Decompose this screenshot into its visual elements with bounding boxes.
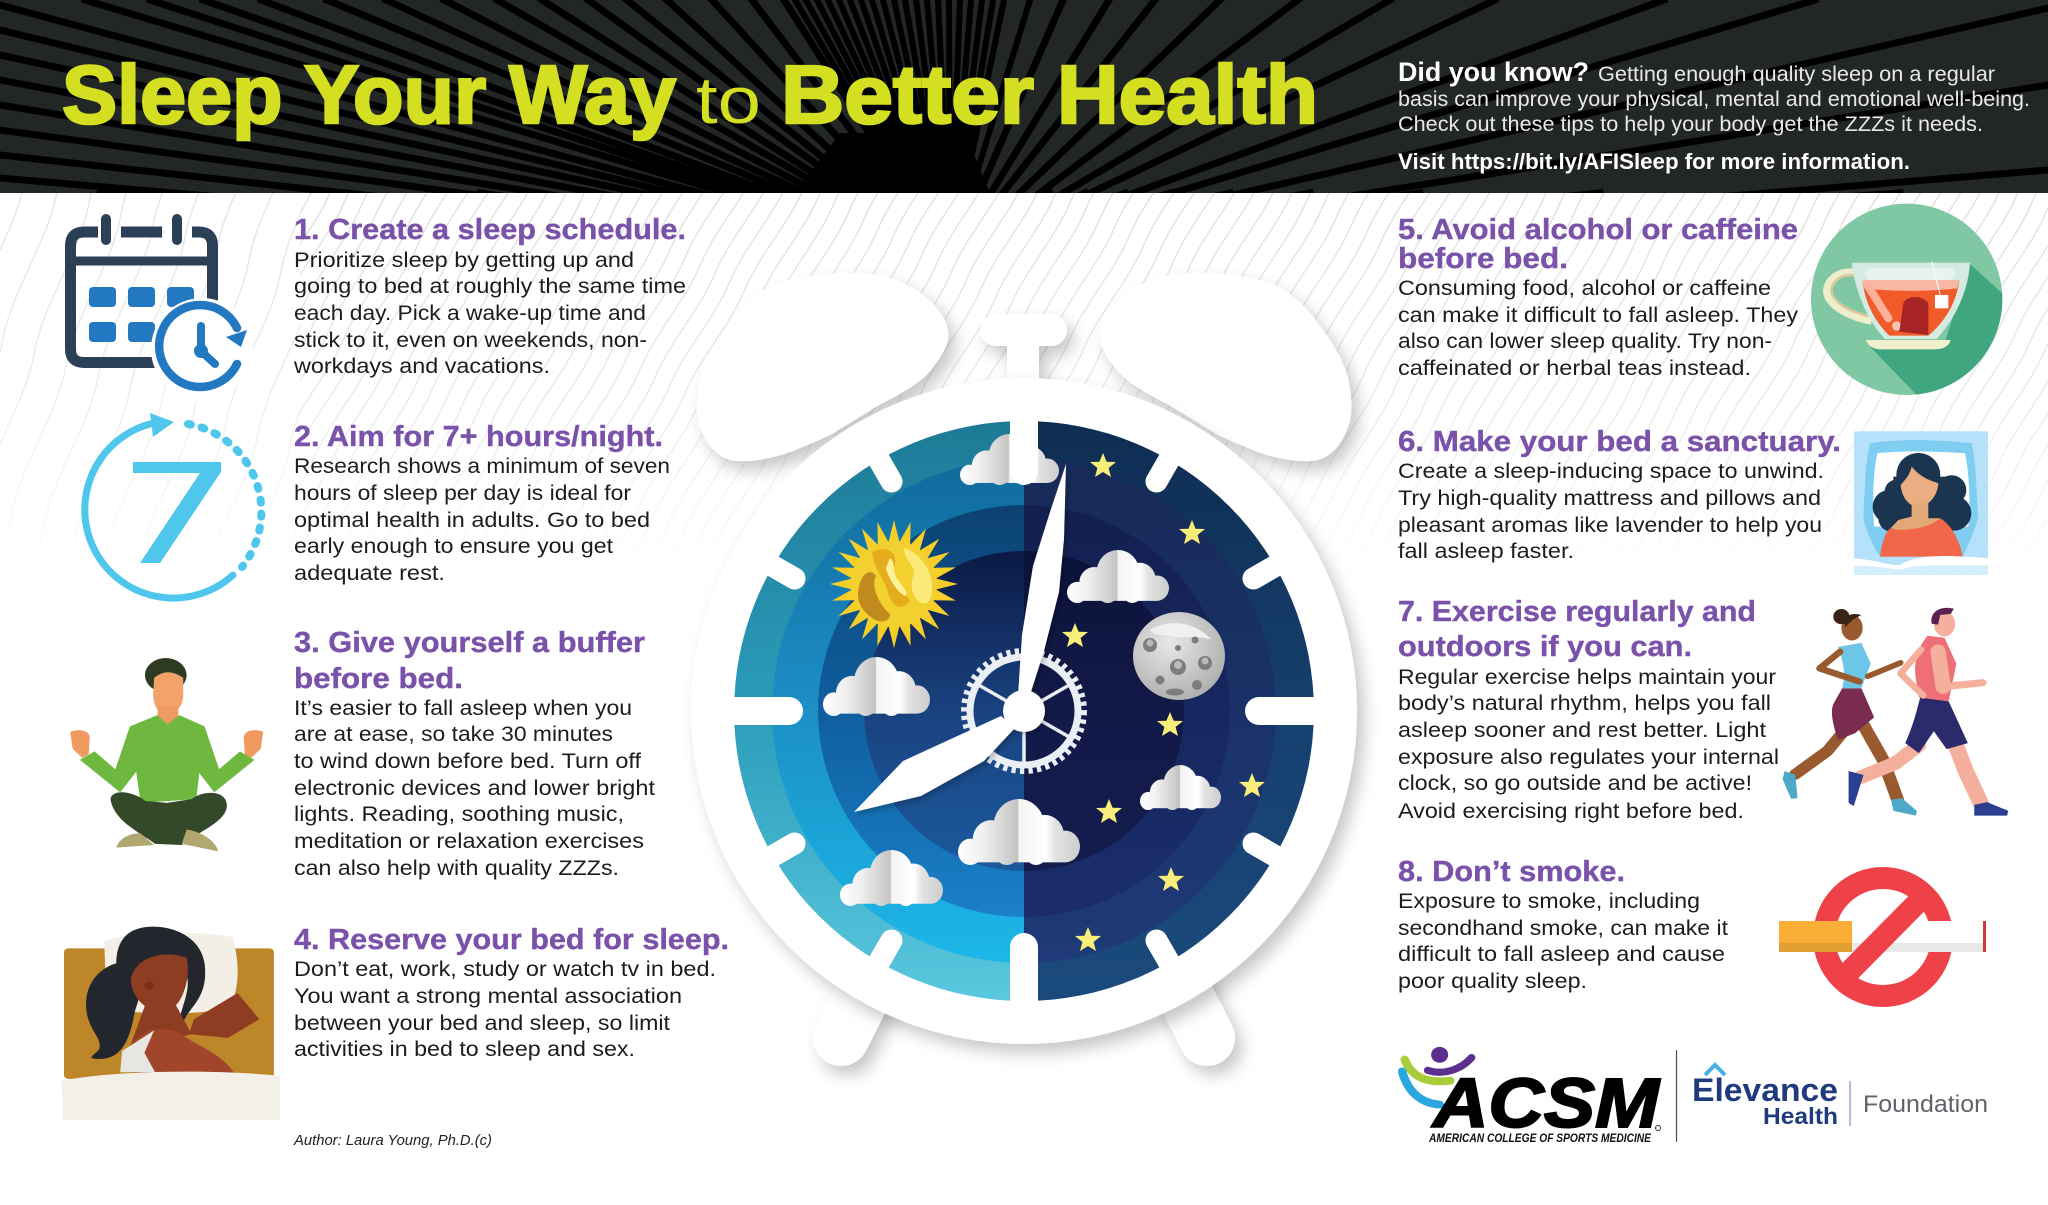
body 8 [1398, 890, 1728, 993]
body 6: Try high-quality mattress and pillows and [1398, 487, 1821, 510]
body 2: adequate rest. [294, 562, 445, 585]
section 8 [1398, 856, 1728, 993]
heading 2: 2. Aim for 7+ hours/night. [294, 421, 663, 453]
body 2: hours of sleep per day is ideal for [294, 482, 631, 505]
heading 5: before bed. [1398, 243, 1568, 275]
alarm clock illustration [691, 273, 1357, 1044]
title: Health [1057, 48, 1318, 141]
clock body [691, 378, 1357, 1044]
body 8: Exposure to smoke, including [1398, 890, 1700, 913]
title: Sleep Your Way [62, 48, 676, 141]
body 3: lights. Reading, soothing music, [294, 803, 624, 826]
section 7 [1398, 596, 1779, 823]
body 5: also can lower sleep quality. Try non- [1398, 330, 1772, 353]
section 1 [293, 214, 686, 378]
body 6: pleasant aromas like lavender to help you [1398, 514, 1822, 537]
author credit: Author: Laura Young, Ph.D.(c) [293, 1132, 492, 1149]
did you know text block: basis can improve your physical, mental and emotional well-being. [1398, 88, 2030, 111]
body 7: Avoid exercising right before bed. [1398, 800, 1744, 823]
icon: no smoking [1779, 878, 1986, 996]
body 3: meditation or relaxation exercises [294, 830, 644, 853]
logo: Elevance Health Foundation: Health [1763, 1103, 1838, 1129]
did you know text block: Getting enough quality sleep on a regular [1598, 63, 1995, 86]
logo: ACSM [1402, 1047, 1661, 1145]
body 7: exposure also regulates your internal [1398, 746, 1779, 769]
body 7 [1398, 666, 1779, 823]
title: Better [781, 48, 1034, 141]
body 6 [1398, 460, 1824, 563]
body 3: electronic devices and lower bright [294, 777, 655, 800]
heading 5 [1398, 214, 1798, 275]
body 2 [294, 455, 670, 585]
icon: seven hour circle [85, 413, 261, 598]
icon: calendar and clock [70, 219, 253, 400]
body 2: optimal health in adults. Go to bed [294, 509, 650, 532]
clock dial night half [1024, 421, 1314, 1001]
did you know text block: Visit https://bit.ly/AFISleep for more information. [1398, 149, 1910, 174]
body 1: going to bed at roughly the same time [294, 275, 686, 298]
body 7: body’s natural rhythm, helps you fall [1398, 692, 1771, 715]
icon: meditating man [70, 658, 263, 851]
body 8: difficult to fall asleep and cause [1398, 943, 1725, 966]
heading 6: 6. Make your bed a sanctuary. [1398, 426, 1841, 458]
body 1 [293, 249, 686, 378]
body 5: caffeinated or herbal teas instead. [1398, 357, 1751, 380]
header band with rays [0, 0, 2048, 193]
body 5: Consuming food, alcohol or caffeine [1398, 277, 1771, 300]
gear [965, 652, 1083, 770]
section 3 [294, 627, 655, 880]
body 6: Create a sleep-inducing space to unwind. [1398, 460, 1824, 483]
body 8: secondhand smoke, can make it [1398, 917, 1728, 940]
logo: Elevance Health Foundation: Elevance [1692, 1072, 1838, 1108]
icon: two runners [1783, 608, 2008, 816]
heading 3: before bed. [294, 663, 463, 695]
clock dial day half [734, 421, 1024, 1001]
body 1: each day. Pick a wake-up time and [294, 302, 646, 325]
logo: Elevance Health Foundation: Foundation [1863, 1091, 1988, 1118]
did you know text block: Did you know? [1398, 57, 1589, 87]
minute and hour hands [854, 464, 1066, 812]
heading 8: 8. Don’t smoke. [1398, 856, 1625, 888]
icon: tea cup [1811, 204, 2013, 397]
clock bells, stem and feet [697, 273, 1351, 1038]
section 5 [1398, 214, 1799, 380]
logo: Elevance Health Foundation [1692, 1065, 1988, 1129]
body 1: Prioritize sleep by getting up and [294, 249, 634, 272]
body 4: between your bed and sleep, so limit [294, 1012, 670, 1035]
logo: ACSM: ACSM [1431, 1064, 1661, 1142]
body 6: fall asleep faster. [1398, 540, 1574, 563]
section 2 [294, 421, 670, 585]
section 6 [1398, 426, 1841, 563]
icon: woman on pillow [1854, 431, 1988, 575]
body 8: poor quality sleep. [1398, 970, 1587, 993]
body 3: are at ease, so take 30 minutes [294, 723, 613, 746]
icon: woman sleeping in bed [62, 927, 280, 1120]
heading 7 [1398, 596, 1756, 663]
heading 3: 3. Give yourself a buffer [294, 627, 645, 659]
body 1: workdays and vacations. [293, 355, 550, 378]
heading 1: 1. Create a sleep schedule. [294, 214, 686, 246]
body 2: early enough to ensure you get [294, 535, 613, 558]
divider between logos [1676, 1050, 1678, 1142]
background pattern lines [0, 193, 2048, 528]
heading 4: 4. Reserve your bed for sleep. [294, 924, 729, 956]
body 7: clock, so go outside and be active! [1398, 772, 1752, 795]
body 3: It’s easier to fall asleep when you [294, 697, 632, 720]
body 7: asleep sooner and rest better. Light [1398, 719, 1766, 742]
hour tick marks [728, 415, 1320, 1005]
logo: ACSM: AMERICAN COLLEGE OF SPORTS MEDICINE [1428, 1133, 1651, 1145]
body 5 [1398, 277, 1799, 380]
heading 3 [294, 627, 645, 695]
title [62, 48, 1318, 141]
body 3: to wind down before bed. Turn off [294, 750, 641, 773]
clouds [823, 434, 1221, 906]
stars [1062, 453, 1265, 951]
title: to [696, 63, 761, 137]
heading 7: 7. Exercise regularly and [1398, 596, 1756, 628]
did you know text block [1398, 57, 2030, 174]
sun [828, 518, 960, 650]
body 2: Research shows a minimum of seven [294, 455, 670, 478]
heading 7: outdoors if you can. [1398, 631, 1692, 663]
body 7: Regular exercise helps maintain your [1398, 666, 1776, 689]
body 1: stick to it, even on weekends, non- [294, 329, 647, 352]
body 3 [294, 697, 655, 880]
moon [1133, 612, 1225, 700]
did you know text block: Check out these tips to help your body get the ZZZs it needs. [1398, 113, 1983, 136]
body 3: can also help with quality ZZZs. [294, 857, 619, 880]
body 4: You want a strong mental association [294, 985, 682, 1008]
body 5: can make it difficult to fall asleep. They [1398, 304, 1799, 327]
section 4 [294, 924, 729, 1061]
body 4: Don’t eat, work, study or watch tv in bed. [294, 958, 716, 981]
body 4: activities in bed to sleep and sex. [294, 1038, 635, 1061]
body 4 [294, 958, 716, 1061]
heading 5: 5. Avoid alcohol or caffeine [1398, 214, 1798, 246]
